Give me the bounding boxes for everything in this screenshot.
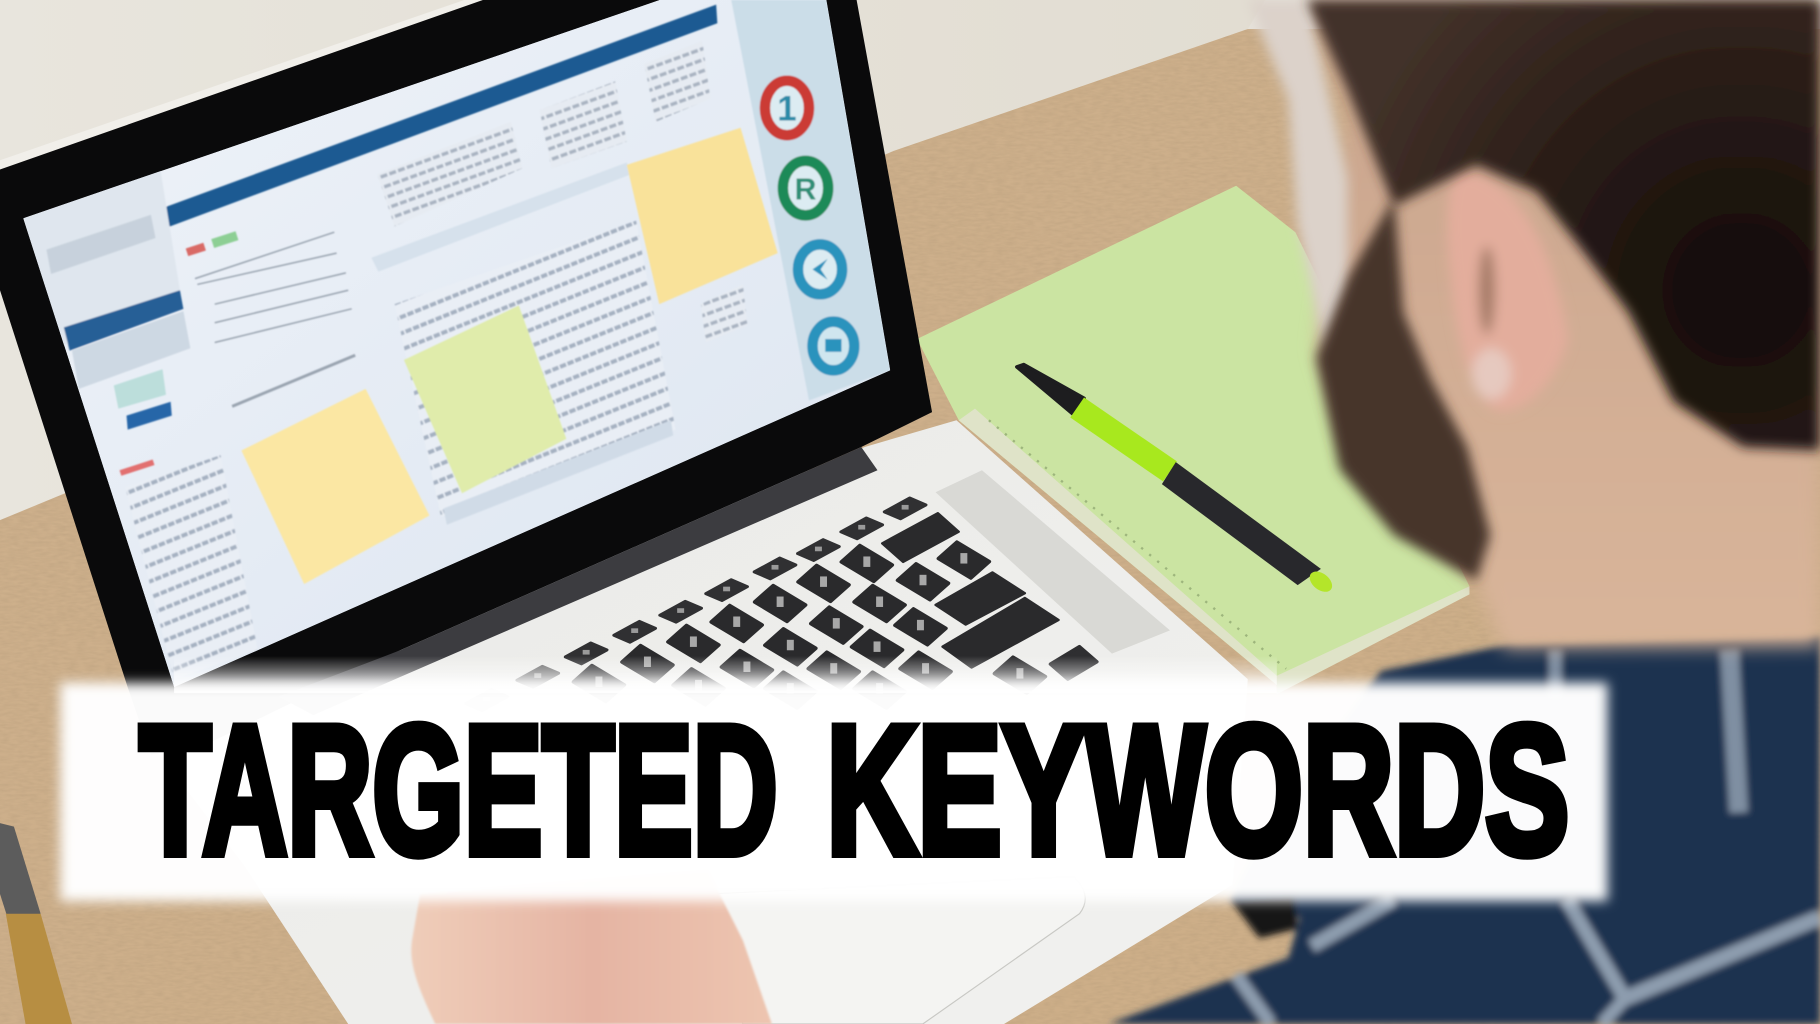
caption block (701, 288, 748, 339)
green sticky note center (404, 305, 566, 493)
icon: red ring badge: 1 (777, 90, 797, 129)
icon: red ring badge (765, 81, 809, 135)
icon: blue ring badge with chat (812, 322, 854, 370)
hair (1307, 0, 1820, 450)
silver top edge (0, 0, 483, 170)
blue header band (160, 5, 717, 229)
title: TARGETED KEYWORDS (139, 687, 1569, 892)
beard (1316, 197, 1490, 580)
palm rest strip (936, 470, 1170, 654)
yellow sticky note bottom left (241, 389, 429, 584)
function key row (466, 498, 926, 711)
wall background (0, 0, 1265, 520)
article text block (395, 221, 676, 517)
main key rows (573, 542, 1045, 708)
pale cheek (1248, 0, 1348, 353)
laptop base (151, 420, 1248, 1024)
left lower text block (125, 455, 258, 679)
neck and face skin (1307, 0, 1820, 648)
ear (1447, 170, 1568, 411)
banner top fade (174, 656, 1277, 693)
tab row (371, 163, 631, 272)
lower grey bar (443, 420, 673, 525)
laptop bezel (0, 0, 932, 755)
laptop screen (23, 0, 890, 687)
text panel top (377, 122, 522, 226)
keyboard (466, 498, 1097, 711)
form lines (195, 232, 355, 406)
trackpad (710, 877, 1085, 1024)
icon: green highlighter pen (1017, 365, 1336, 596)
white title banner (60, 683, 1608, 901)
person looking at laptop (1108, 0, 1820, 1024)
shift key (942, 598, 1059, 668)
small red and green tags (186, 231, 238, 256)
yellow sticky note top right (627, 128, 778, 304)
left sidebar toolbar (23, 168, 180, 348)
icon: green ring badge (783, 161, 828, 215)
laptop (0, 0, 1248, 1024)
laptop hinge strip (279, 447, 878, 715)
large key (882, 513, 959, 562)
enter key (936, 572, 1025, 625)
shirt (1108, 636, 1820, 1024)
sidebar logo (114, 369, 172, 430)
icon: green ring badge: R (795, 174, 817, 207)
small arrow key (1050, 647, 1097, 679)
title: TARGETED KEYWORDS: TARGETED (139, 687, 778, 892)
red heading label (120, 459, 154, 476)
green notebook (917, 186, 1469, 694)
pencil on desk (0, 823, 72, 1024)
hand on trackpad (411, 871, 772, 1024)
icon: blue ring badge (798, 244, 842, 294)
side panel (731, 0, 890, 401)
